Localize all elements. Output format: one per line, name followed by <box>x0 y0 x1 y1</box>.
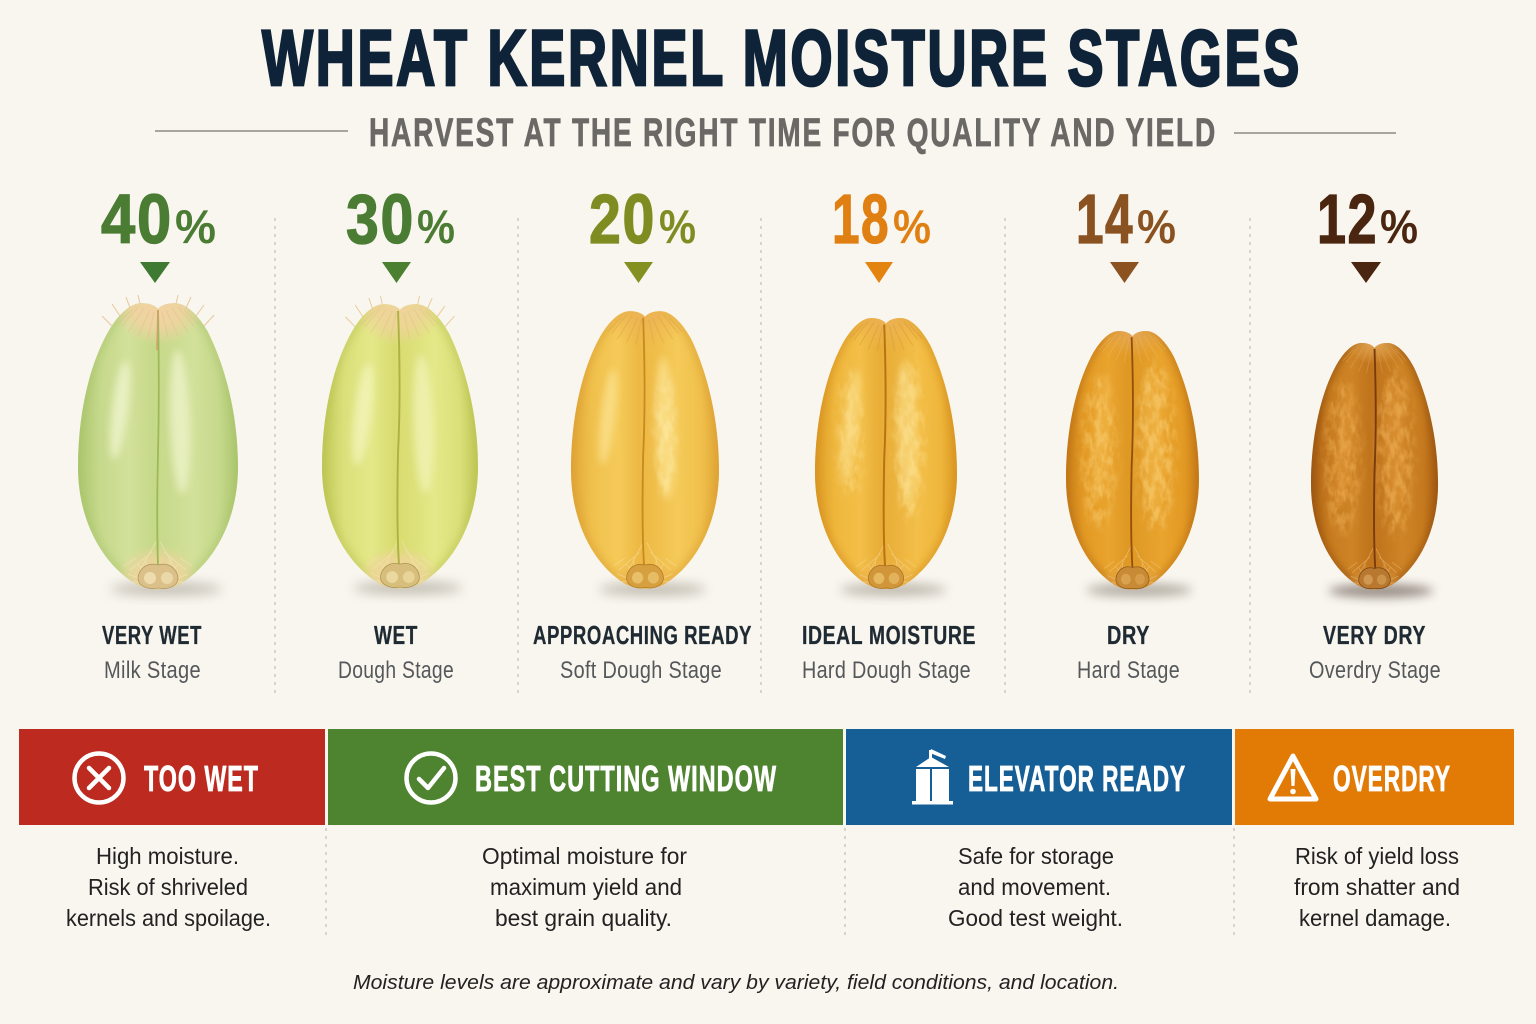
moisture value 20%: 20 <box>589 180 656 258</box>
label: approaching ready: Soft Dough Stage <box>560 657 722 684</box>
moisture value 14%: 14 <box>1076 180 1134 258</box>
label: approaching ready <box>533 620 752 684</box>
text: elevator ready description: Safe for storage <box>958 843 1114 869</box>
panel: too wet <box>19 729 325 931</box>
kernel germ <box>138 564 178 589</box>
kernel germ <box>868 565 904 588</box>
label: ideal moisture <box>802 620 976 684</box>
kernel germ <box>380 563 420 588</box>
text: overdry description: from shatter and <box>1294 874 1460 900</box>
marker arrow <box>1351 262 1381 283</box>
heading: too wet: TOO WET <box>144 758 259 799</box>
kernel germ <box>1116 567 1149 589</box>
kernel: hard dough stage <box>815 318 957 602</box>
label: very dry: Overdry Stage <box>1309 657 1441 684</box>
text: elevator ready description: and movement. <box>958 874 1111 900</box>
kernel: overdry stage <box>1311 323 1438 604</box>
marker arrow <box>1110 262 1139 283</box>
moisture value 18%: % <box>893 200 931 253</box>
text: best window description: best grain quality. <box>495 905 672 931</box>
moisture value 14%: % <box>1137 200 1176 253</box>
icon: cross in circle <box>74 754 124 802</box>
label: very wet <box>102 620 202 684</box>
moisture value 30%: % <box>417 200 455 253</box>
text: overdry description: Risk of yield loss <box>1295 843 1459 869</box>
icon: grain elevator <box>912 749 953 804</box>
panel: overdry <box>1235 729 1514 931</box>
text: too wet description <box>66 843 271 931</box>
label: dry: DRY <box>1107 620 1150 650</box>
label: wet: WET <box>374 620 418 650</box>
label: approaching ready: APPROACHING READY <box>533 620 752 650</box>
stage 1: very wet <box>78 180 238 612</box>
kernel: dough stage <box>322 296 478 600</box>
text: overdry description <box>1294 843 1460 931</box>
label: very wet: Milk Stage <box>104 657 201 684</box>
stage 6: very dry <box>1311 180 1438 604</box>
label: dry <box>1077 620 1180 684</box>
label: dry: Hard Stage <box>1077 657 1180 684</box>
label: very dry: VERY DRY <box>1323 620 1426 650</box>
label: ideal moisture: Hard Dough Stage <box>802 657 971 684</box>
moisture value 20%: % <box>659 200 696 253</box>
heading: best cutting window: BEST CUTTING WINDOW <box>475 758 777 799</box>
moisture value 30%: 30 <box>346 180 415 258</box>
kernel: milk stage <box>78 294 238 602</box>
stage 2: wet <box>322 180 478 609</box>
icon: check in circle <box>406 754 456 802</box>
icon: warning triangle <box>1270 756 1316 799</box>
label: very wet: VERY WET <box>102 620 202 650</box>
text: best window description <box>482 843 687 931</box>
footnote: Moisture levels are approximate and vary by variety, field conditions, and location. <box>353 972 1119 994</box>
marker arrow <box>382 262 411 283</box>
moisture value 18%: 18 <box>832 180 890 258</box>
stage 3: approaching ready <box>571 180 719 607</box>
text: elevator ready description <box>948 843 1123 931</box>
kernel germ <box>1359 568 1390 589</box>
stage labels <box>102 620 1441 684</box>
text: too wet description: Risk of shriveled <box>88 874 248 900</box>
text: overdry description: kernel damage. <box>1299 905 1451 931</box>
kernel: hard stage <box>1066 307 1199 606</box>
moisture value 40%: 40 <box>101 180 173 258</box>
panel: elevator ready <box>846 729 1232 931</box>
marker arrow <box>140 262 170 283</box>
label: wet: Dough Stage <box>338 657 454 684</box>
moisture value 12%: 12 <box>1317 180 1378 258</box>
stage 4: ideal moisture <box>815 180 957 607</box>
kernel germ <box>626 564 664 588</box>
label: wet <box>338 620 454 684</box>
label: ideal moisture: IDEAL MOISTURE <box>802 620 976 650</box>
moisture value 12%: % <box>1380 200 1418 253</box>
text: best window description: maximum yield and <box>490 874 682 900</box>
stage 5: dry <box>1066 180 1199 606</box>
text: too wet description: kernels and spoilage. <box>66 905 271 931</box>
heading: elevator ready: ELEVATOR READY <box>968 758 1186 799</box>
text: elevator ready description: Good test weight. <box>948 905 1123 931</box>
text: best window description: Optimal moisture for <box>482 843 687 869</box>
marker arrow <box>865 262 893 283</box>
marker arrow <box>624 262 653 283</box>
label: very dry <box>1309 620 1441 684</box>
panel: best cutting window <box>328 729 843 931</box>
kernel: soft dough stage <box>571 311 719 602</box>
text: too wet description: High moisture. <box>96 843 239 869</box>
moisture value 40%: % <box>175 200 216 253</box>
heading: overdry: OVERDRY <box>1333 758 1451 799</box>
